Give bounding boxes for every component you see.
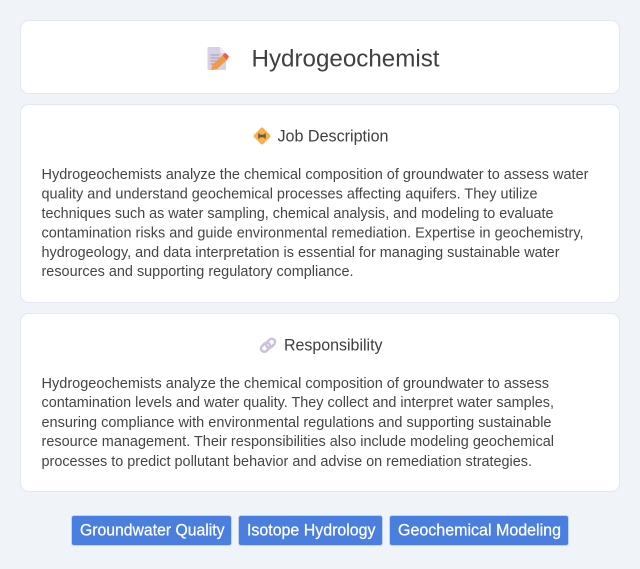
job description text: hydrogeology, and data interpretation is essential for managing sustainable water [42,245,560,261]
responsibility heading: Responsibility [284,336,383,354]
responsibility text [42,376,554,470]
responsibility text: processes to predict pollutant behavior and advise on remediation strategies. [42,454,532,470]
tag: groundwater quality [72,516,232,546]
responsibility text: Hydrogeochemists analyze the chemical composition of groundwater to assess [42,376,549,392]
responsibility text: resource management. Their responsibilities also include modeling geochemical [42,434,554,450]
icon: link [260,337,276,353]
job description text: contamination risks and guide environmental remediation. Expertise in geochemistry, [42,226,584,242]
job description text: techniques such as water sampling, chemical analysis, and modeling to evaluate [42,206,554,222]
tag: isotope hydrology [238,516,382,546]
tag: geochemical modeling [390,516,568,546]
tag: groundwater quality: Groundwater Quality [80,522,225,540]
title text: Hydrogeochemist [252,46,440,72]
responsibility text: contamination levels and water quality. They collect and interpret water samples, [42,395,554,411]
tags row [72,516,568,546]
icon: construction diamond [253,127,271,145]
job description text: Hydrogeochemists analyze the chemical composition of groundwater to assess water [42,167,589,183]
job description text: quality and understand geochemical processes affecting aquifers. They utilize [42,186,538,202]
icon: memo with pencil [208,47,229,70]
job description text: resources and supporting regulatory compliance. [42,264,354,280]
panel: job description [20,104,620,302]
job description heading: Job Description [278,128,388,146]
tag: isotope hydrology: Isotope Hydrology [247,522,376,540]
job description text [42,167,589,280]
panel: title [20,20,620,94]
responsibility text: ensuring compliance with environmental regulations and supporting sustainable [42,415,552,431]
panel: responsibility [20,314,620,492]
tag: geochemical modeling: Geochemical Modeling [398,522,561,540]
